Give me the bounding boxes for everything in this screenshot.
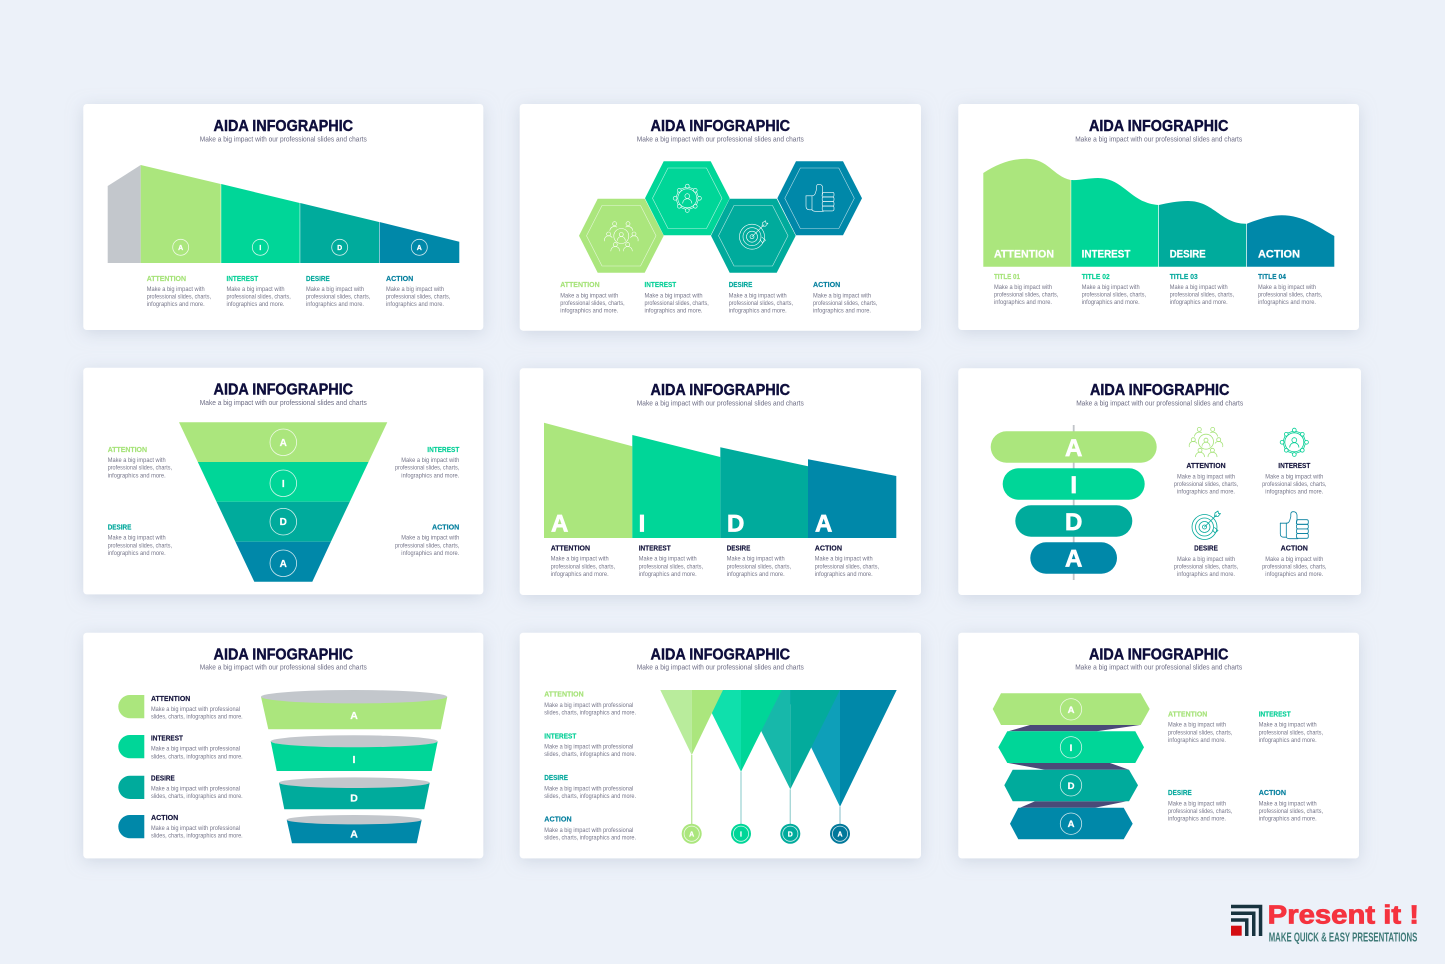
text: desire: slides, charts, infographics and more. xyxy=(151,793,243,800)
text: action xyxy=(395,522,460,557)
text: title 03 xyxy=(1170,272,1234,306)
pill stack xyxy=(991,425,1157,580)
text: interest xyxy=(644,280,709,315)
card background xyxy=(83,104,483,330)
text: interest: infographics and more. xyxy=(644,308,703,315)
text: action: professional slides, charts, xyxy=(386,294,451,301)
text: attention: ATTENTION xyxy=(560,280,600,289)
panel: card 8 triangles xyxy=(520,633,921,858)
text: attention: infographics and more. xyxy=(1168,737,1226,744)
band labels: INTEREST xyxy=(1082,249,1131,261)
text: interest: Make a big impact with xyxy=(401,457,459,464)
hexagon: desire xyxy=(711,199,796,273)
text: interest: Make a big impact with xyxy=(639,556,697,563)
text: attention: Make a big impact with xyxy=(147,286,205,293)
title: AIDA INFOGRAPHIC xyxy=(1090,382,1229,399)
text: title 04 xyxy=(1258,272,1323,306)
subtitle: Make a big impact with our professional slides and charts xyxy=(637,136,804,144)
hexagon: interest xyxy=(645,161,730,235)
panel: card 3 waves xyxy=(958,104,1359,330)
title: AIDA INFOGRAPHIC xyxy=(214,118,353,135)
hexagon: attention xyxy=(579,199,664,273)
block chart: A xyxy=(551,510,568,537)
text: desire: Make a big impact with xyxy=(1177,556,1235,563)
text: attention: infographics and more. xyxy=(551,571,609,578)
text: interest: professional slides, charts, xyxy=(644,300,709,307)
text: desire: Make a big impact with professional xyxy=(151,785,240,792)
text: interest: infographics and more. xyxy=(1259,737,1317,744)
text: interest: professional slides, charts, xyxy=(226,294,291,301)
text: title 01: TITLE 01 xyxy=(994,272,1020,281)
pill stack: I xyxy=(1070,472,1077,499)
cone: action xyxy=(287,815,422,843)
text: interest: INTEREST xyxy=(226,274,259,283)
card background xyxy=(83,368,483,594)
text: action: ACTION xyxy=(1281,544,1308,553)
text: interest: professional slides, charts, xyxy=(1259,729,1323,736)
text: action xyxy=(1262,544,1327,578)
letter badges: D xyxy=(337,245,342,252)
text: desire: Make a big impact with xyxy=(108,535,166,542)
text: title 01 xyxy=(994,272,1059,306)
text: title 01: Make a big impact with xyxy=(994,284,1052,291)
stem and badge: attention: A xyxy=(689,831,694,838)
funnel chart: D xyxy=(280,517,287,528)
stem and badge: action xyxy=(830,807,850,844)
text: attention: Make a big impact with xyxy=(108,457,166,464)
text: title 03: TITLE 03 xyxy=(1170,272,1198,281)
text: action: ACTION xyxy=(544,815,572,824)
text: attention: infographics and more. xyxy=(560,308,619,315)
text: action: professional slides, charts, xyxy=(813,300,878,307)
text: attention: ATTENTION xyxy=(1168,709,1207,718)
panel: card 4 funnel xyxy=(83,368,483,594)
cone: desire xyxy=(279,777,430,809)
text: title 03: infographics and more. xyxy=(1170,299,1228,306)
subtitle: Make a big impact with our professional slides and charts xyxy=(200,136,367,144)
text: action: Make a big impact with xyxy=(401,535,459,542)
text: desire: DESIRE xyxy=(727,543,751,552)
text: interest xyxy=(1262,461,1327,496)
text: action: professional slides, charts, xyxy=(815,563,879,570)
subtitle: Make a big impact with our professional slides and charts xyxy=(1075,664,1243,672)
text: interest xyxy=(226,274,291,308)
funnel chart xyxy=(179,422,387,582)
ribbon chart: D xyxy=(1068,781,1075,792)
text: attention: professional slides, charts, xyxy=(560,300,625,307)
text: desire: infographics and more. xyxy=(727,571,785,578)
wave chart xyxy=(983,159,1334,267)
text: desire: professional slides, charts, xyxy=(729,300,793,307)
text: action: ACTION xyxy=(432,522,459,532)
subtitle: Make a big impact with our professional slides and charts xyxy=(200,664,367,672)
text: action: ACTION xyxy=(815,543,842,552)
text: title 02: Make a big impact with xyxy=(1082,284,1140,291)
text: desire xyxy=(544,773,636,800)
text: interest xyxy=(544,731,636,758)
text: action: infographics and more. xyxy=(815,571,873,578)
text: title 04: TITLE 04 xyxy=(1258,272,1286,281)
text: interest: Make a big impact with xyxy=(226,286,284,293)
text: attention: Make a big impact with xyxy=(1168,722,1226,729)
text: interest: Make a big impact with professional xyxy=(151,746,240,753)
text: desire: infographics and more. xyxy=(306,301,364,308)
letter badges: A xyxy=(178,245,183,252)
card background xyxy=(958,104,1359,330)
tab: attention xyxy=(118,695,144,718)
text: action: professional slides, charts, xyxy=(1262,564,1327,571)
text: attention: infographics and more. xyxy=(1177,489,1235,496)
slope chart xyxy=(108,165,459,263)
text: action: professional slides, charts, xyxy=(1259,808,1323,815)
stem and badge: interest xyxy=(731,772,751,844)
text: title 02: professional slides, charts, xyxy=(1082,292,1146,299)
tab: desire xyxy=(118,776,144,799)
text: desire xyxy=(108,522,172,557)
text: attention: Make a big impact with xyxy=(551,556,609,563)
text: desire: professional slides, charts, xyxy=(1174,564,1238,571)
text: attention: ATTENTION xyxy=(108,445,147,454)
text: desire: DESIRE xyxy=(306,274,330,283)
text: desire: DESIRE xyxy=(1168,788,1192,797)
card background xyxy=(520,633,921,858)
text: desire: slides, charts, infographics and more. xyxy=(544,793,636,800)
text: action: Make a big impact with xyxy=(1259,800,1317,807)
text: attention xyxy=(544,689,636,716)
hexagon: action xyxy=(777,161,862,235)
text: attention: Make a big impact with professional xyxy=(544,702,633,709)
text: attention: Make a big impact with xyxy=(1177,473,1235,480)
ribbon chart: A xyxy=(1068,705,1075,716)
pill stack: A xyxy=(1065,545,1082,572)
text: attention: ATTENTION xyxy=(544,689,584,698)
text: interest: INTEREST xyxy=(151,734,184,743)
text: action: infographics and more. xyxy=(1259,815,1317,822)
text: interest: INTEREST xyxy=(427,445,460,454)
panel: card 1 stepped slope xyxy=(83,104,483,330)
text: attention xyxy=(108,445,172,479)
text: title 02 xyxy=(1082,272,1146,306)
panel: card 9 ribbon hexagons xyxy=(958,633,1359,858)
letter badges: I xyxy=(259,245,261,252)
text: title 02: infographics and more. xyxy=(1082,299,1140,306)
text: action xyxy=(151,813,243,840)
text: desire: infographics and more. xyxy=(729,308,787,315)
text: attention xyxy=(1168,709,1233,744)
text: action xyxy=(1259,788,1323,822)
text: desire: Make a big impact with xyxy=(727,556,785,563)
stem and badge: desire xyxy=(780,789,800,844)
band labels: DESIRE xyxy=(1170,249,1206,261)
text: attention: infographics and more. xyxy=(147,301,205,308)
title: AIDA INFOGRAPHIC xyxy=(214,646,353,663)
title: AIDA INFOGRAPHIC xyxy=(1089,118,1228,135)
text: action: slides, charts, infographics and more. xyxy=(151,833,243,840)
letter badges xyxy=(173,239,427,255)
tab: action xyxy=(118,815,144,838)
text: action xyxy=(815,543,879,578)
card background xyxy=(83,633,483,858)
text: title 03: professional slides, charts, xyxy=(1170,292,1234,299)
cone: desire: D xyxy=(350,793,358,805)
text: attention: professional slides, charts, xyxy=(147,294,211,301)
stem and badge: attention xyxy=(682,755,702,844)
band labels: ACTION xyxy=(1258,249,1300,261)
text: action: Make a big impact with xyxy=(813,293,871,300)
text: interest: professional slides, charts, xyxy=(639,563,703,570)
band labels xyxy=(994,249,1300,261)
tab: interest xyxy=(118,735,144,758)
text: desire: Make a big impact with xyxy=(306,286,364,293)
text: attention xyxy=(560,280,625,315)
text: action xyxy=(386,274,451,308)
text: interest: infographics and more. xyxy=(1265,489,1324,496)
subtitle: Make a big impact with our professional slides and charts xyxy=(637,664,804,672)
text: interest: INTEREST xyxy=(1278,461,1311,470)
text: interest xyxy=(151,734,243,760)
text: interest xyxy=(1259,709,1323,744)
subtitle: Make a big impact with our professional slides and charts xyxy=(1075,136,1243,144)
text: interest: INTEREST xyxy=(639,543,671,552)
text: interest: Make a big impact with xyxy=(1265,473,1323,480)
text: action: infographics and more. xyxy=(386,301,444,308)
text: attention xyxy=(551,543,615,578)
text: desire: infographics and more. xyxy=(1177,571,1235,578)
text: attention: ATTENTION xyxy=(151,694,190,703)
text: action: ACTION xyxy=(386,274,413,283)
text: action: professional slides, charts, xyxy=(395,542,460,549)
text: interest: professional slides, charts, xyxy=(395,465,460,472)
text: desire: infographics and more. xyxy=(1168,815,1226,822)
block chart xyxy=(544,423,896,538)
text: title 01: infographics and more. xyxy=(994,299,1052,306)
text: desire xyxy=(727,543,791,578)
subtitle: Make a big impact with our professional slides and charts xyxy=(200,400,367,407)
text: action xyxy=(544,815,636,842)
text: action: Make a big impact with professional xyxy=(151,825,240,832)
text: attention xyxy=(147,274,211,308)
triangle chart xyxy=(660,690,897,807)
text: action: ACTION xyxy=(1259,788,1286,797)
letter badges: A xyxy=(417,245,422,252)
text: attention: Make a big impact with xyxy=(560,293,618,300)
text: interest xyxy=(639,543,703,578)
stem and badge: action: A xyxy=(837,831,843,838)
text: interest: INTEREST xyxy=(1259,709,1291,718)
text: attention xyxy=(151,694,243,720)
panel: card 5 descending blocks xyxy=(520,368,921,595)
text: action: Make a big impact with xyxy=(1265,556,1323,563)
text: title 01: professional slides, charts, xyxy=(994,292,1059,299)
text: action: infographics and more. xyxy=(1265,571,1324,578)
text: desire: DESIRE xyxy=(151,773,175,782)
panel: card 6 pills and icons xyxy=(958,368,1361,595)
title: AIDA INFOGRAPHIC xyxy=(214,382,353,399)
text: desire: DESIRE xyxy=(544,773,568,782)
text: attention: professional slides, charts, xyxy=(1174,481,1238,488)
card background xyxy=(958,633,1359,858)
funnel chart: A xyxy=(280,438,287,449)
text: interest: infographics and more. xyxy=(639,571,697,578)
card background xyxy=(958,368,1361,595)
band labels: ATTENTION xyxy=(994,249,1054,261)
logo: Present it xyxy=(1231,901,1419,944)
text: interest: infographics and more. xyxy=(226,301,285,308)
ribbon chart xyxy=(993,693,1150,839)
title: AIDA INFOGRAPHIC xyxy=(651,646,790,663)
text: desire xyxy=(1168,788,1233,822)
text: interest: Make a big impact with xyxy=(644,293,702,300)
title: AIDA INFOGRAPHIC xyxy=(1089,646,1228,663)
text: attention: professional slides, charts, xyxy=(551,563,615,570)
text: desire: professional slides, charts, xyxy=(1168,808,1233,815)
text: attention xyxy=(1174,461,1238,496)
ribbon chart: I xyxy=(1070,743,1072,754)
text: desire xyxy=(306,274,371,308)
cone: interest xyxy=(271,735,438,771)
pill stack: D xyxy=(1065,509,1082,536)
text: attention: ATTENTION xyxy=(147,274,186,283)
text: interest: INTEREST xyxy=(544,731,577,740)
icon: network xyxy=(1280,428,1308,456)
text: action: infographics and more. xyxy=(401,550,460,557)
cone: action: A xyxy=(350,828,358,840)
text: title 04: Make a big impact with xyxy=(1258,284,1316,291)
title: AIDA INFOGRAPHIC xyxy=(651,118,790,135)
title: AIDA INFOGRAPHIC xyxy=(651,382,790,399)
text: action: Make a big impact with professional xyxy=(544,827,633,834)
cone: interest: I xyxy=(353,754,356,766)
text: title 04: infographics and more. xyxy=(1258,299,1316,306)
panel: card 7 cones xyxy=(83,633,483,858)
text: desire: DESIRE xyxy=(1194,544,1218,553)
text: interest: infographics and more. xyxy=(401,472,460,479)
text: desire: DESIRE xyxy=(729,280,753,289)
subtitle: Make a big impact with our professional slides and charts xyxy=(637,400,804,408)
text: interest: slides, charts, infographics and more. xyxy=(151,753,243,760)
text: action: ACTION xyxy=(151,813,178,822)
text: interest: slides, charts, infographics and more. xyxy=(544,751,636,758)
text: interest: Make a big impact with xyxy=(1259,722,1317,729)
cone: attention: A xyxy=(350,710,358,722)
text: attention: professional slides, charts, xyxy=(1168,729,1233,736)
text: title 03: Make a big impact with xyxy=(1170,284,1228,291)
text: attention: Make a big impact with professional xyxy=(151,706,240,713)
text: desire: infographics and more. xyxy=(108,550,166,557)
icon: target xyxy=(1192,511,1220,540)
text: attention: professional slides, charts, xyxy=(108,465,172,472)
stem and badge: interest: I xyxy=(740,831,742,838)
text: title 02: TITLE 02 xyxy=(1082,272,1110,281)
text: desire: professional slides, charts, xyxy=(727,563,791,570)
text: interest: INTEREST xyxy=(644,280,677,289)
text: attention: ATTENTION xyxy=(1186,461,1226,470)
text: desire: professional slides, charts, xyxy=(108,542,172,549)
block chart: A xyxy=(815,510,832,537)
text: desire: DESIRE xyxy=(108,522,132,532)
panel: card 2 hexagons xyxy=(520,104,921,331)
text: action: Make a big impact with xyxy=(386,286,444,293)
funnel chart: A xyxy=(280,559,287,570)
text: interest: Make a big impact with professional xyxy=(544,744,633,751)
text: desire xyxy=(729,280,793,315)
text: attention: slides, charts, infographics and more. xyxy=(151,713,243,720)
text: desire xyxy=(151,773,243,800)
text: action: Make a big impact with xyxy=(815,556,873,563)
text: desire: Make a big impact with xyxy=(1168,800,1226,807)
stem and badge: desire: D xyxy=(788,831,793,838)
text: attention: infographics and more. xyxy=(108,472,166,479)
cone: attention xyxy=(261,690,447,729)
block chart: D xyxy=(727,510,744,537)
text: attention: ATTENTION xyxy=(551,543,590,552)
block chart: I xyxy=(639,510,645,537)
text: desire: Make a big impact with xyxy=(729,293,787,300)
brand name: Present it ! xyxy=(1268,901,1419,929)
text: desire: Make a big impact with professional xyxy=(544,785,633,792)
text: action: ACTION xyxy=(813,280,840,289)
ribbon chart: A xyxy=(1068,819,1075,830)
text: title 04: professional slides, charts, xyxy=(1258,292,1323,299)
text: action xyxy=(813,280,878,315)
text: action: infographics and more. xyxy=(813,308,871,315)
icon: thumbs up xyxy=(1280,512,1308,539)
icon: people xyxy=(1189,427,1223,457)
card background xyxy=(520,104,921,331)
text: desire xyxy=(1174,544,1238,578)
icon: logo mark xyxy=(1231,905,1262,936)
text: attention: slides, charts, infographics and more. xyxy=(544,709,636,716)
funnel chart: I xyxy=(282,479,285,490)
text: interest: professional slides, charts, xyxy=(1262,481,1327,488)
card background xyxy=(520,368,921,595)
text: action: slides, charts, infographics and more. xyxy=(544,835,636,842)
pill stack: A xyxy=(1065,435,1082,462)
subtitle: Make a big impact with our professional slides and charts xyxy=(1076,400,1244,408)
text: interest xyxy=(395,445,460,479)
text: desire: professional slides, charts, xyxy=(306,294,371,301)
